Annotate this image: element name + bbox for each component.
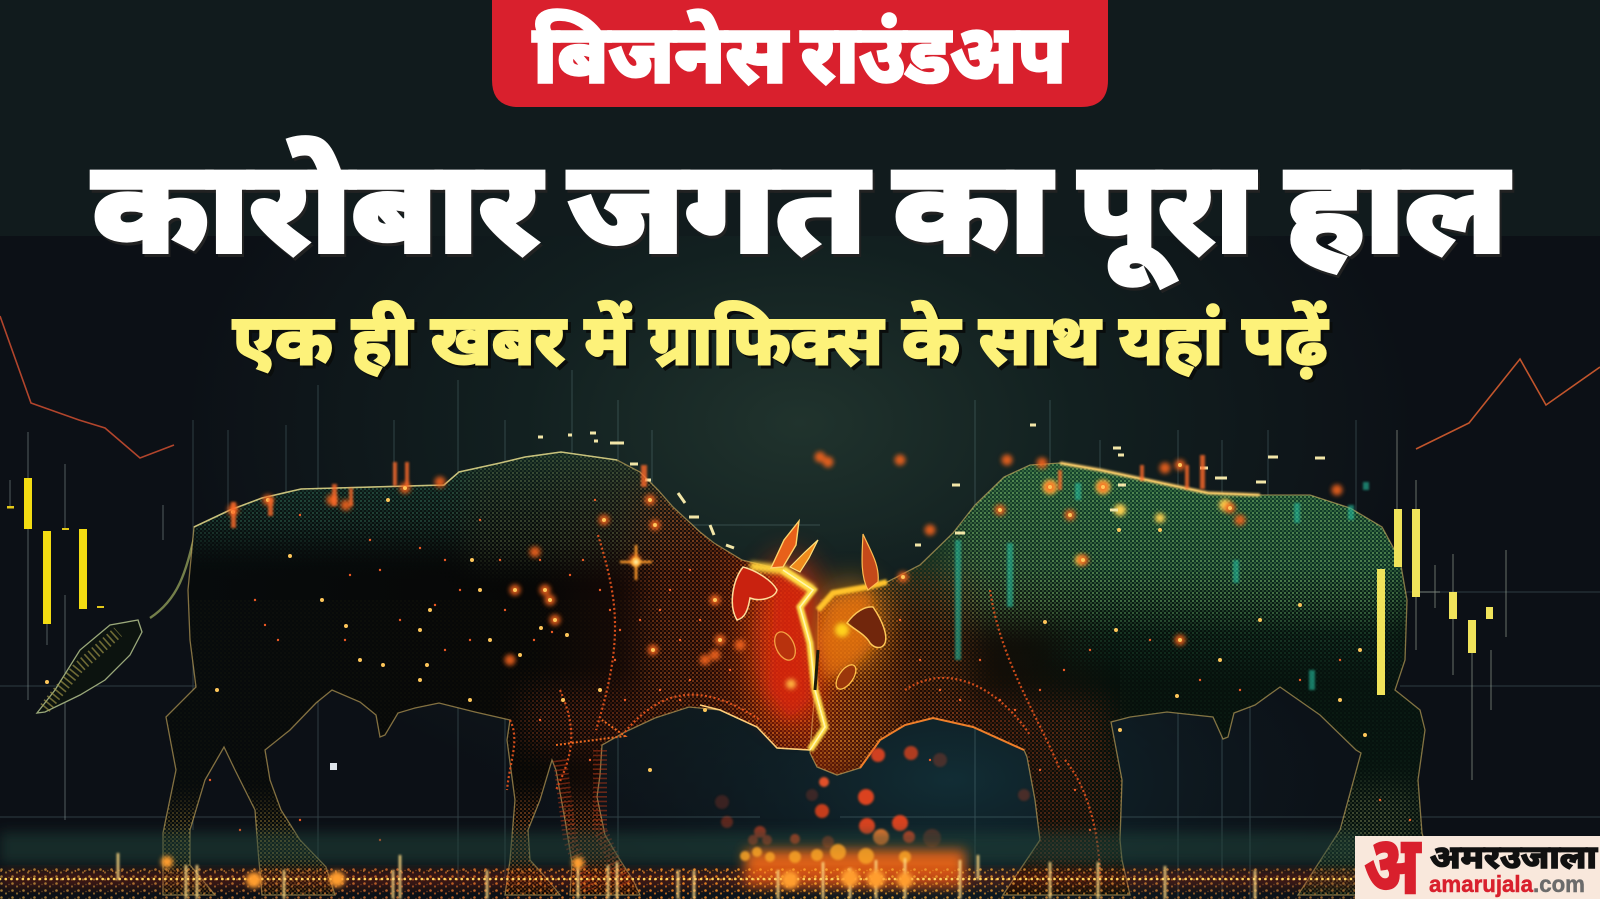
pill label [533,9,1068,99]
sub heading: एक ही खबर में ग्राफिक्स के साथ यहां पढ़ें [233,300,1329,379]
tiny red orange sparks [210,500,1410,840]
right bull [805,450,1430,899]
pill label: बिजनेस [533,9,789,99]
logo url: amarujala.com [1429,871,1585,897]
chart grid lines [0,370,1600,899]
orange cross flare [620,545,652,580]
ground dotted lights [0,868,1360,899]
dotted texture [805,450,1430,899]
flying data dashes on bull backs [538,425,1325,548]
tail [37,530,196,713]
back candle glows [231,455,1205,528]
eyes and nostrils [771,629,799,663]
main heading: हाल [1286,137,1509,278]
main heading: कारोबार [93,137,543,278]
right bull ear [847,607,886,648]
glowing orbs on right bull back [1043,480,1231,565]
glow sparks: soft halo [233,457,1337,660]
inner muscle lines [905,590,1100,880]
logo: amar ujala [1355,821,1600,899]
main heading: का [894,137,1052,278]
pill label: राउंडअप [801,10,1068,99]
logo wordmark: अमरउजाला [1430,839,1598,875]
dotted texture [150,440,830,899]
left orange trend line [0,316,174,458]
header pill [492,0,1108,107]
ground vertical flares [118,853,1255,899]
ground haze [0,832,1360,886]
body [810,463,1430,895]
main heading: पूरा [1079,137,1255,287]
left bull ear [732,567,777,620]
glow sparks: bright core [47,465,1365,770]
main heading: जगत [569,137,870,278]
bokeh lights [715,746,1030,848]
right orange trend line [1416,359,1600,449]
body [163,452,825,895]
teal streaks [958,482,1366,690]
ground bright flares [161,856,913,889]
main heading [93,137,1509,287]
glowing heads [732,521,887,750]
outline [163,452,825,895]
right candlesticks [1377,430,1506,780]
left bull [37,440,830,899]
left bull horns [771,521,799,568]
right bull horn [862,534,878,590]
left candlesticks [7,432,163,820]
outline [810,463,1430,895]
small white marker [330,763,337,770]
inner muscle lines [507,535,760,790]
